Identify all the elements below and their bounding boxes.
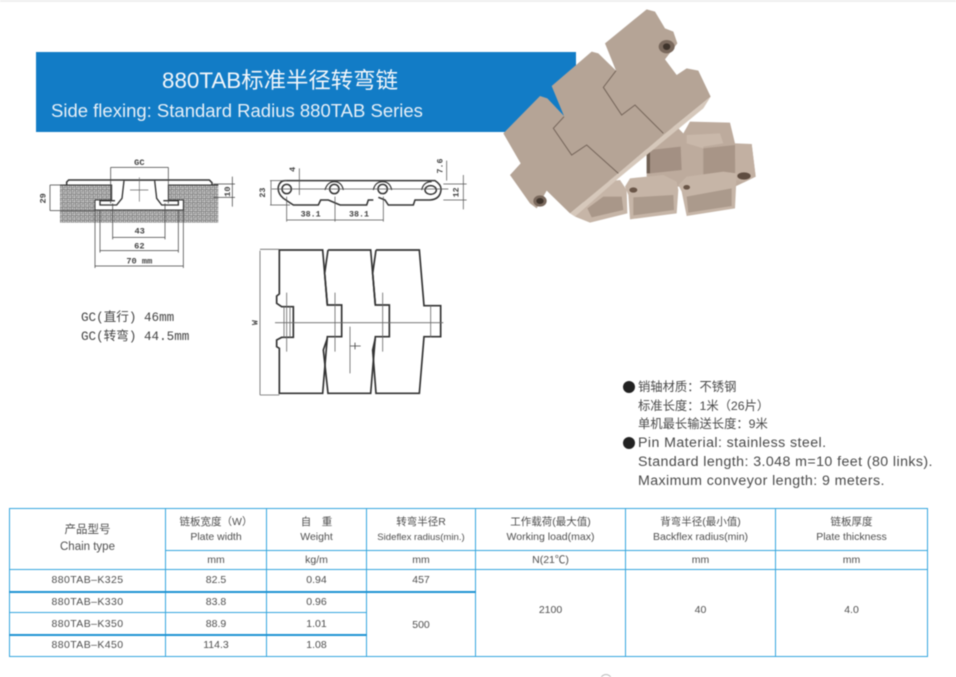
specification table: 产品型号 [64, 524, 110, 536]
specification table: mm [207, 554, 225, 566]
specification table: 工作载荷(最大值) [510, 516, 591, 528]
heading: English subtitle: Side flexing: Standard Radius 880TAB Series [51, 100, 423, 121]
cross-section drawing with dimensions: 10 [223, 186, 233, 197]
note: Chinese: 标准长度：1米（26片） [638, 398, 769, 412]
pin and length notes [622, 380, 933, 489]
specification table: 0.94 [306, 574, 327, 586]
note: English: Maximum conveyor length: 9 meters. [638, 473, 885, 489]
cross-section drawing with dimensions [38, 158, 236, 268]
cross-section drawing with dimensions: 29 [38, 193, 48, 204]
specification table: 链板宽度（W） [180, 516, 252, 528]
specification table: 链板厚度 [830, 516, 872, 528]
specification table: Plate width [190, 530, 242, 542]
specification table: 2100 [539, 604, 562, 616]
specification table: 880TAB–K350 [52, 618, 123, 630]
bullet: Chinese [623, 381, 635, 393]
product photo: chain links [503, 9, 756, 223]
side-view and top-view drawings [250, 158, 468, 396]
specification table: Weight [300, 530, 333, 542]
side view of chain: 4 [288, 167, 298, 172]
GC dimension notes [80, 310, 190, 344]
specification table: 82.5 [206, 574, 226, 586]
top edge band [0, 0, 956, 2]
note: Chinese: 销轴材质：不锈钢 [638, 380, 736, 394]
specification table: 457 [412, 574, 430, 586]
specification table: Working load(max) [507, 530, 594, 542]
heading: Chinese title: 880TAB标准半径转弯链 [162, 68, 398, 93]
GC dimension notes: GC(转弯) 44.5mm [81, 330, 189, 344]
specification table: 1.01 [306, 618, 327, 630]
specification table: 背弯半径(最小值) [660, 516, 741, 528]
note: English: Standard length: 3.048 m=10 feet (80 links). [638, 454, 933, 470]
specification table: 880TAB–K330 [52, 596, 123, 608]
specification table: Backflex radius(min) [653, 530, 748, 542]
specification table: Sideflex radius(min.) [377, 532, 465, 542]
specification table: Plate thickness [816, 530, 887, 542]
cross-section drawing with dimensions: 62 [134, 241, 145, 251]
specification table: 4.0 [844, 604, 859, 616]
specification table: mm [692, 554, 709, 566]
side-view and top-view drawings: W [250, 320, 260, 325]
cross-section drawing with dimensions: GC [134, 158, 145, 168]
specification table: 83.8 [206, 596, 226, 608]
GC dimension notes: GC(直行) 46mm [81, 311, 174, 325]
specification table: 0.96 [306, 596, 327, 608]
small mark at bottom edge [600, 674, 612, 677]
cross-section drawing with dimensions: 70 mm [126, 256, 152, 266]
specification table: N(21℃) [532, 554, 569, 566]
specification table: 500 [412, 619, 430, 631]
side view of chain [258, 158, 467, 222]
specification table: mm [843, 554, 860, 566]
specification table: 40 [695, 604, 706, 616]
specification table: kg/m [305, 554, 328, 566]
bullet: English [623, 437, 635, 449]
specification table: 880TAB–K325 [52, 574, 123, 586]
specification table [8, 507, 929, 658]
title banner [36, 52, 576, 132]
top plates [503, 9, 711, 213]
specification table: 880TAB–K450 [52, 639, 123, 651]
side view of chain: 23 [258, 188, 268, 198]
side view of chain: 7.6 [435, 158, 445, 174]
note: Chinese [638, 380, 769, 431]
specification table: 1.08 [306, 639, 327, 651]
specification table: 转弯半径R [396, 516, 446, 528]
front pocket links [575, 180, 627, 223]
side view of chain: 38.1 [349, 210, 369, 220]
back pocket links [647, 122, 756, 187]
specification table: 114.3 [203, 639, 229, 651]
side view of chain: 12 [451, 187, 461, 197]
specification table: 88.9 [206, 618, 226, 630]
side view of chain: 38.1 [301, 210, 321, 220]
specification table: 自 重 [301, 516, 332, 528]
note: Chinese: 单机最长输送长度：9米 [638, 417, 768, 431]
specification table: Chain type [60, 541, 115, 553]
specification table: mm [412, 554, 430, 566]
cross-section drawing with dimensions: 43 [134, 226, 145, 236]
note: English [638, 435, 933, 489]
note: English: Pin Material: stainless steel. [638, 435, 826, 451]
top view of plates [277, 250, 441, 393]
